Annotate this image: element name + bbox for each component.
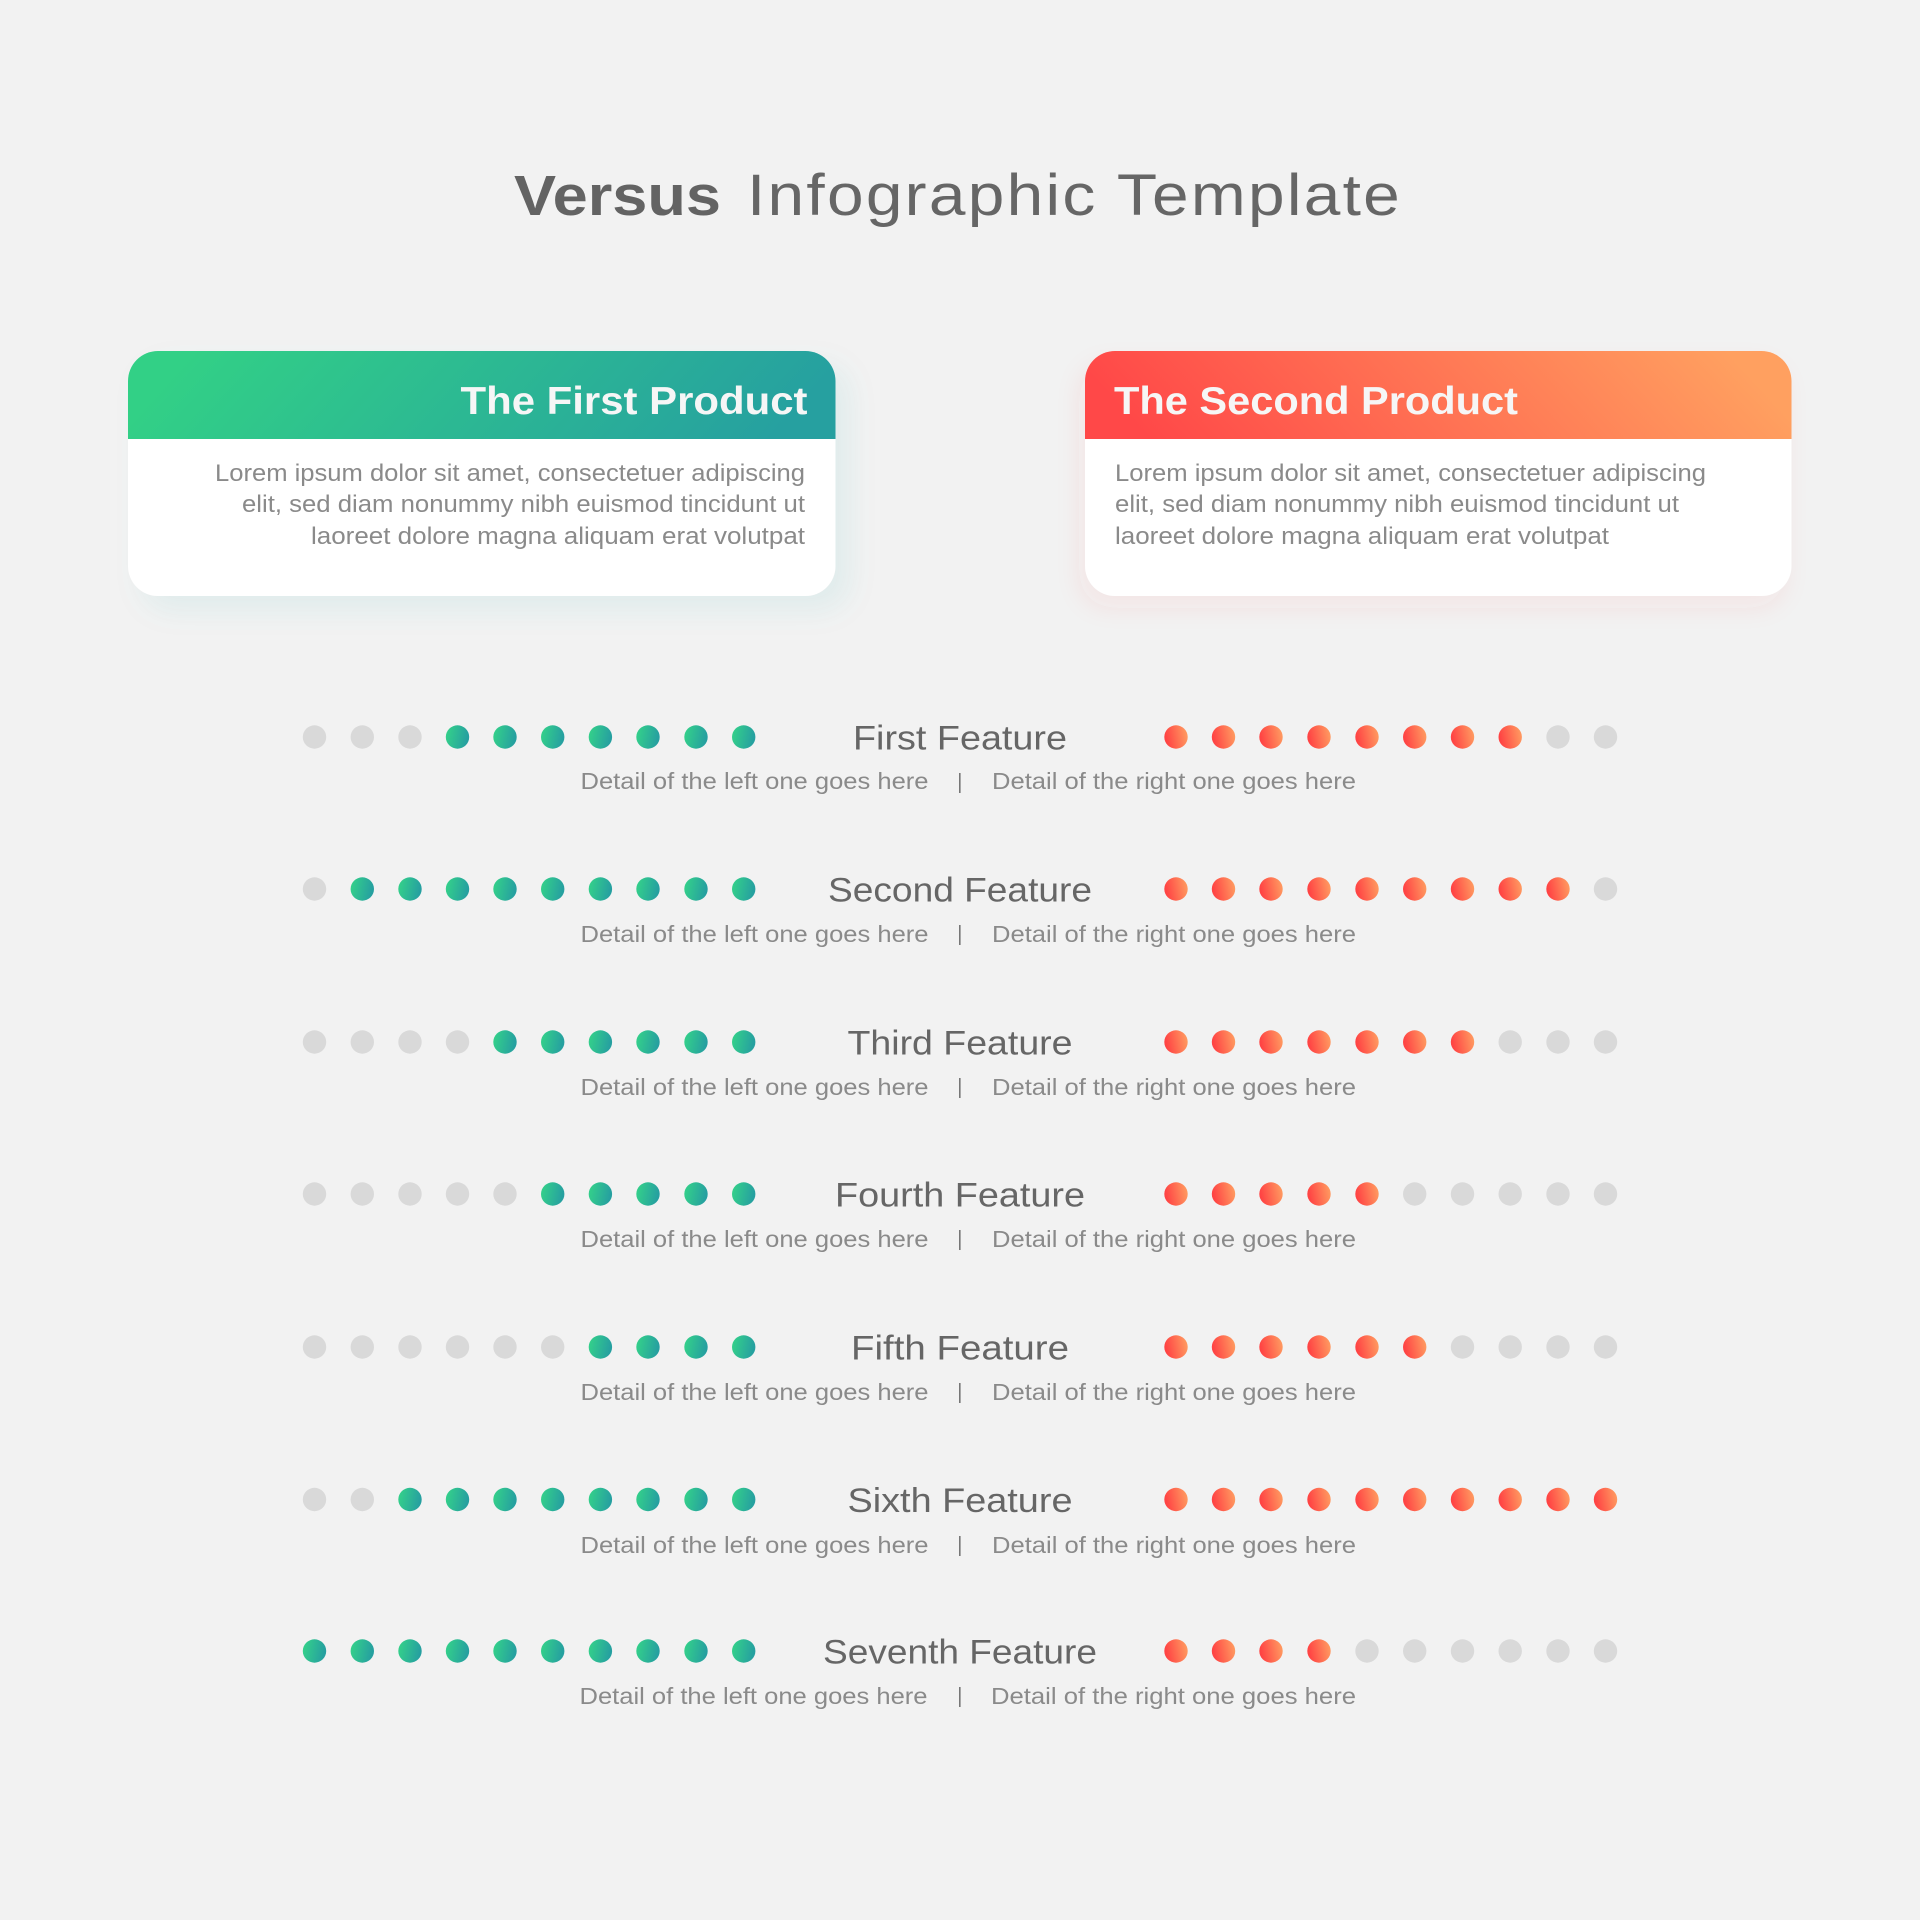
- second feature name: Second Feature: [828, 872, 1092, 910]
- row: seventh feature: [303, 1634, 1617, 1709]
- title: [514, 163, 1402, 228]
- heading: the first product: The First Product: [460, 380, 808, 423]
- panel: second product: [1085, 351, 1792, 596]
- fourth feature details: Detail of the left one goes here: [580, 1226, 928, 1252]
- second product description: laoreet dolore magna aliquam erat volutpat: [1115, 523, 1609, 550]
- second feature details: [580, 921, 1356, 947]
- third feature name: Third Feature: [848, 1024, 1072, 1062]
- first product description: [215, 460, 805, 550]
- second product description: elit, sed diam nonummy nibh euismod tincidunt ut: [1115, 491, 1679, 518]
- sixth feature details: Detail of the left one goes here: [580, 1532, 928, 1558]
- seventh feature details: Detail of the left one goes here: [580, 1683, 928, 1709]
- fourth feature left rating: [303, 1182, 755, 1206]
- row: third feature: [303, 1024, 1617, 1100]
- first feature details: [580, 768, 1356, 794]
- fourth feature right rating: [1164, 1182, 1617, 1206]
- first feature right rating: [1164, 725, 1617, 749]
- fifth feature details: Detail of the right one goes here: [992, 1379, 1356, 1405]
- sixth feature left rating: [303, 1488, 755, 1511]
- third feature right rating: [1164, 1030, 1617, 1054]
- sixth feature details: Detail of the right one goes here: [992, 1532, 1356, 1558]
- sixth feature name: Sixth Feature: [848, 1482, 1072, 1520]
- second feature right rating: [1164, 877, 1617, 901]
- third feature details: Detail of the left one goes here: [580, 1074, 928, 1100]
- sixth feature details: [580, 1532, 1356, 1558]
- row: fourth feature: [303, 1176, 1617, 1252]
- first feature left rating: [303, 725, 755, 749]
- row: first feature: [303, 720, 1617, 794]
- second feature details: Detail of the left one goes here: [580, 921, 928, 947]
- fifth feature details: [580, 1379, 1356, 1405]
- second feature left rating: [303, 877, 755, 901]
- title: Versus: [514, 164, 721, 228]
- fifth feature details: Detail of the left one goes here: [580, 1379, 928, 1405]
- first product description: laoreet dolore magna aliquam erat volutpat: [311, 523, 805, 550]
- sixth feature right rating: [1164, 1488, 1617, 1511]
- second product description: Lorem ipsum dolor sit amet, consectetuer adipiscing: [1115, 460, 1706, 487]
- first feature details: Detail of the right one goes here: [992, 768, 1356, 794]
- first product description: Lorem ipsum dolor sit amet, consectetuer adipiscing: [215, 460, 805, 487]
- first feature details: Detail of the left one goes here: [580, 768, 928, 794]
- seventh feature details: Detail of the right one goes here: [991, 1683, 1356, 1709]
- fifth feature left rating: [303, 1335, 755, 1359]
- seventh feature name: Seventh Feature: [823, 1634, 1097, 1672]
- title: Infographic Template: [747, 163, 1402, 228]
- seventh feature right rating: [1164, 1639, 1617, 1663]
- third feature details: Detail of the right one goes here: [992, 1074, 1356, 1100]
- row: fifth feature: [303, 1330, 1617, 1405]
- seventh feature left rating: [303, 1639, 755, 1663]
- panel: first product: [128, 351, 836, 596]
- row: second feature: [303, 872, 1617, 947]
- fifth feature right rating: [1164, 1335, 1617, 1359]
- second feature details: Detail of the right one goes here: [992, 921, 1356, 947]
- first product header band: [128, 351, 836, 439]
- second product description: [1115, 460, 1706, 550]
- third feature left rating: [303, 1030, 755, 1054]
- heading: the second product: The Second Product: [1114, 380, 1518, 423]
- seventh feature details: [580, 1683, 1356, 1709]
- second product header band: [1085, 351, 1792, 439]
- first product description: elit, sed diam nonummy nibh euismod tincidunt ut: [242, 491, 805, 518]
- third feature details: [580, 1074, 1356, 1100]
- first feature name: First Feature: [853, 720, 1067, 758]
- fourth feature details: Detail of the right one goes here: [992, 1226, 1356, 1252]
- fourth feature details: [580, 1226, 1356, 1252]
- row: sixth feature: [303, 1482, 1617, 1558]
- fourth feature name: Fourth Feature: [835, 1176, 1085, 1214]
- fifth feature name: Fifth Feature: [851, 1330, 1069, 1368]
